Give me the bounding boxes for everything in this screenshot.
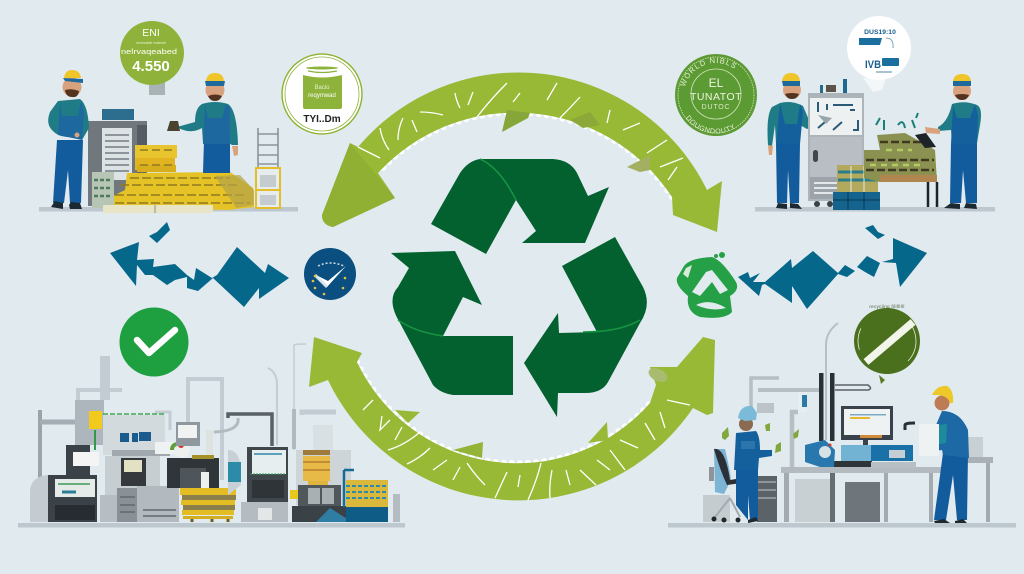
badge: white label with can: Bacio [314,85,330,91]
right terminal machine [214,414,288,522]
badge: white label with can [281,53,363,135]
stamp: green tunatot: WORLD NIBLS [680,58,736,86]
crates of bottles [833,165,880,210]
recycling arrow: left [391,251,513,395]
scene: workers sorting material, top left [39,21,363,213]
stamp: green tunatot: DUTOC [702,104,730,111]
seated lab technician [722,406,799,523]
lab chair [703,449,749,522]
top recycling arc arrow [322,72,722,232]
scene: sorting machine and workers, top right [675,16,995,212]
ground shelf [18,523,405,528]
speech bubble: IVB [865,59,881,71]
machine [808,79,864,207]
central machine [100,414,190,522]
bottom recycling arc arrow [309,337,715,500]
monitor [841,406,893,446]
worker right [925,74,981,209]
worker left [48,70,89,209]
scene: laboratory workstation, bottom right [668,304,1016,528]
speech badge: green certificate: ENI [142,27,160,39]
worker right [167,73,238,173]
central recycling symbol [391,159,647,417]
badge: olive no-symbol [854,304,920,384]
speech badge: green certificate: 4.550 [132,58,170,75]
yellow pallet stack [180,488,236,522]
scene: recycling plant, bottom left [18,344,405,528]
badge: blue verification check [304,248,356,300]
stamp: green tunatot: EL [709,76,724,90]
monitor and dark cabinet [167,422,219,488]
recycling arrow: top [431,159,609,254]
lamp pole and arms [751,323,870,470]
left connector arrows [110,222,289,307]
badge: white label with can: reqymwad [308,93,336,99]
stacked materials and equipment [290,450,400,522]
background pipes and stacks [40,344,336,522]
stamp: green tunatot: TUNATOT [690,91,742,103]
recycling arrow: right [524,237,647,417]
speech badge: green certificate: nelrvaqeabed [121,47,177,56]
ladder and crates [256,128,280,208]
left processing machines [30,400,104,522]
machine blocks and desk [757,392,993,522]
teal poster [228,462,241,482]
yellow material pile [92,145,254,213]
icon: green recycled bottle [677,252,737,318]
speech badge: green certificate: renewable material [136,41,166,45]
badge: green check circle [120,308,188,376]
stamp: green tunatot: DOUGNDOUTY [686,115,734,134]
speech badge: green certificate [120,21,184,95]
machine [88,109,147,206]
worker left [768,73,812,209]
badge: white label with can: TYI..Dm [303,114,341,125]
ground shelf [755,207,995,212]
ground shelf [668,523,1016,528]
right connector arrows [738,225,927,309]
speech bubble: DUS19:10 [864,29,896,36]
standing engineer [905,386,969,523]
ground shelf [39,207,298,212]
speech bubble [847,16,911,92]
table with sorted material [864,113,937,207]
blue analyser equipment [805,440,913,467]
stamp: green tunatot [675,54,757,136]
teal sign [228,450,241,495]
dark columns [819,373,834,441]
badge: olive no-symbol: recycling fillllllll [869,304,905,309]
